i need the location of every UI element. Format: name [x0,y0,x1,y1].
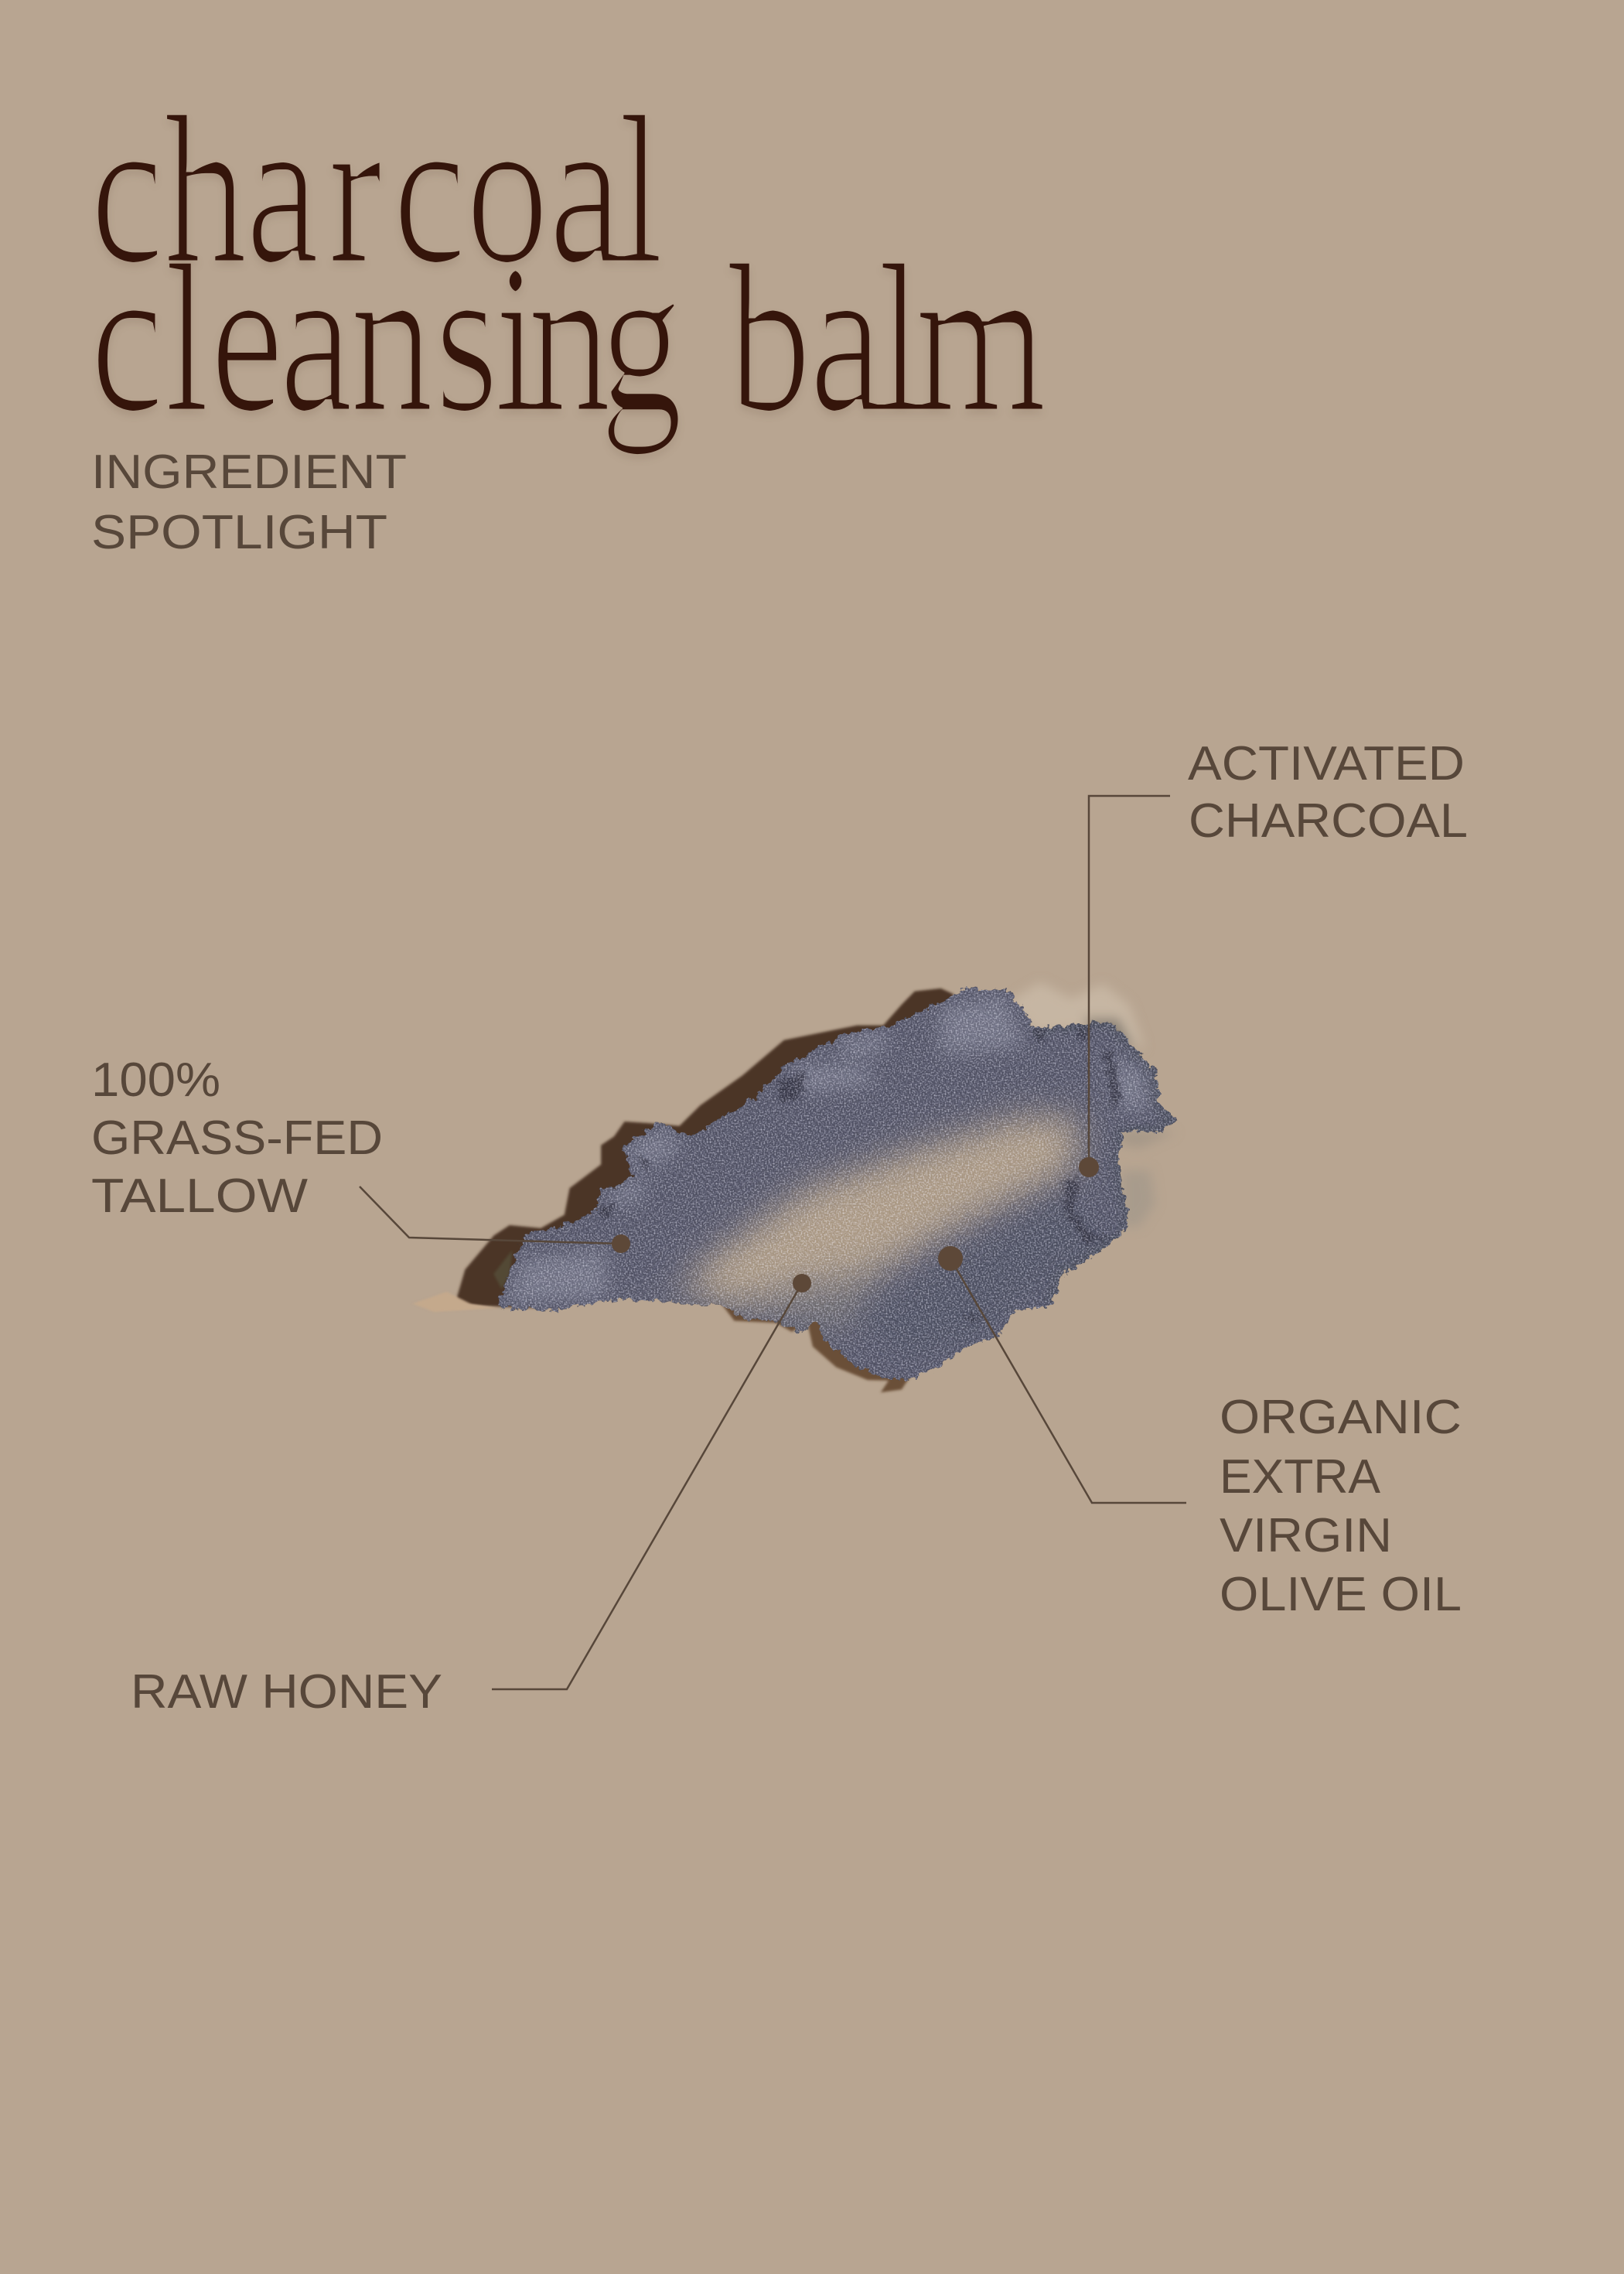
body base shape [497,988,1176,1381]
marker dot [1079,1157,1099,1177]
title [89,73,1048,455]
leader line [360,1187,621,1244]
label: CHARCOAL [1189,794,1468,848]
label [1188,737,1468,848]
title: cleansing balm [89,221,1048,455]
label: TALLOW [91,1169,309,1223]
balm smear image [413,982,1176,1392]
leader line [492,1283,802,1689]
infographic canvas [93,114,1466,1708]
marker dot [793,1274,811,1292]
smear body [497,988,1176,1381]
label: 100% [91,1053,220,1107]
marker dot [612,1234,630,1253]
label: OLIVE OIL [1220,1568,1462,1621]
darker lower lobe [1014,1311,1015,1312]
callout: olive oil [938,1246,1462,1621]
callout: grass-fed tallow [91,1053,630,1253]
label [1220,1391,1462,1621]
label: EXTRA [1220,1450,1381,1504]
lighter ridges [507,995,1150,1303]
dark crevices [599,1029,1121,1325]
label: VIRGIN [1220,1509,1392,1562]
label: ACTIVATED [1188,737,1465,790]
smear cast shadow [455,988,954,1392]
leader line [950,1258,1186,1503]
label: RAW HONEY [131,1665,442,1719]
pale central streak [680,1117,1082,1301]
callout: raw honey [131,1274,811,1719]
callout: activated charcoal [1079,737,1468,1177]
smear shading [507,995,1176,1360]
darkened edge [1035,1021,1176,1306]
subtitle [91,446,407,559]
subtitle: INGREDIENT [91,446,407,499]
label: ORGANIC [1220,1391,1462,1444]
marker dot [938,1246,963,1271]
label [91,1053,383,1223]
leader line [1089,796,1170,1167]
subtitle: SPOTLIGHT [91,506,387,559]
smear pale haze [1008,982,1176,1227]
title: charcoal [89,73,665,306]
label: GRASS-FED [91,1111,383,1165]
smear light tail [413,1292,499,1312]
